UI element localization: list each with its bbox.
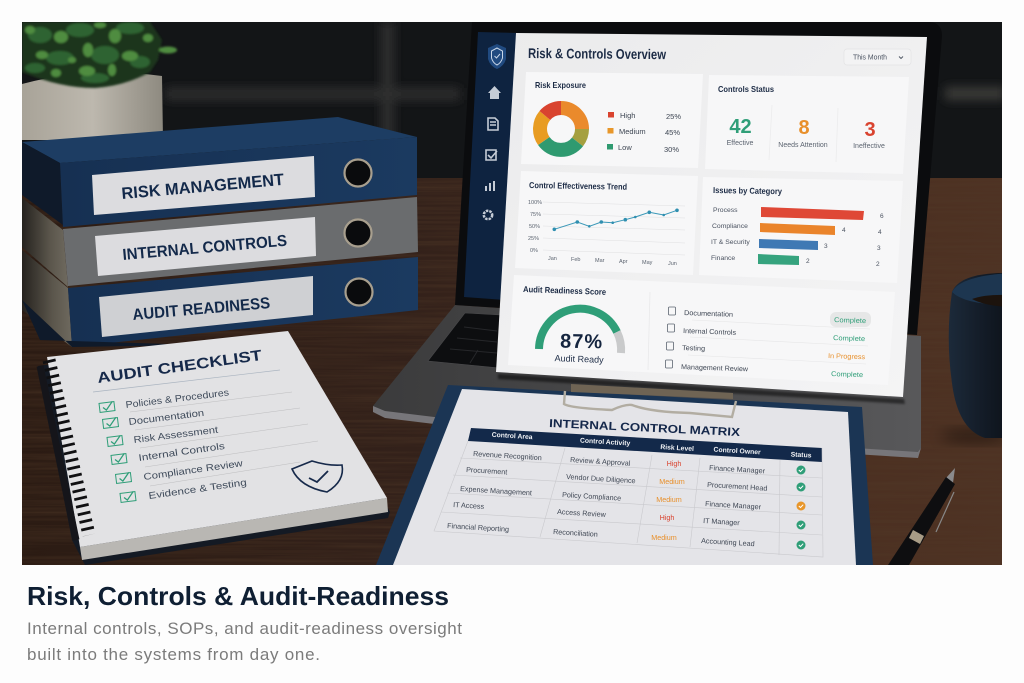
ring <box>344 160 372 186</box>
row: management review: Complete <box>831 371 863 379</box>
item: internal controls <box>111 441 226 464</box>
row: revenue recognition: High <box>667 459 681 468</box>
notebook: audit checklist <box>38 331 390 565</box>
label <box>99 276 313 337</box>
row: expense management: Expense Management <box>460 484 532 497</box>
screen bezel <box>455 22 942 335</box>
row: procurement: Vendor Due Diligence <box>566 472 636 485</box>
checklist title: AUDIT CHECKLIST <box>96 347 263 387</box>
bar chart: 3 <box>824 243 828 250</box>
row: testing: Testing <box>682 345 705 353</box>
card heading: Audit Readiness Score <box>523 284 606 297</box>
bar chart <box>711 207 884 268</box>
row: financial reporting: Financial Reporting <box>447 521 509 534</box>
keyboard <box>428 313 500 368</box>
donut legend: 45% <box>665 128 680 137</box>
row: management review <box>666 360 863 379</box>
line chart: Jan <box>548 256 557 262</box>
header labels: Control Owner <box>713 447 761 456</box>
item: internal controls: Internal Controls <box>138 441 226 464</box>
dashboard panel <box>496 33 927 404</box>
coffee mug <box>941 273 1010 443</box>
metal clip <box>564 384 736 417</box>
donut chart <box>540 108 582 150</box>
laptop <box>373 22 942 458</box>
bar chart: 4 <box>878 229 882 236</box>
card heading: Risk Exposure <box>535 80 586 90</box>
line chart: 25% <box>528 236 539 242</box>
period selector: This Month <box>853 54 887 62</box>
row: revenue recognition <box>473 449 806 475</box>
line chart: Feb <box>571 257 580 263</box>
matrix table <box>434 428 823 557</box>
panel shadow <box>498 374 905 404</box>
line chart: May <box>642 260 653 266</box>
clipboard board <box>376 385 873 565</box>
notebook cover <box>38 331 390 565</box>
icon: shield check <box>292 461 342 492</box>
dashboard title: Risk & Controls Overview <box>528 45 666 62</box>
card heading: Control Effectiveness Trend <box>529 180 627 192</box>
row: it access: High <box>660 513 674 522</box>
row: procurement <box>466 465 806 493</box>
table grid <box>434 441 823 557</box>
nav icon: home <box>488 86 501 99</box>
nav icon: checklist <box>486 150 497 160</box>
row: documentation: Documentation <box>684 310 733 319</box>
row: revenue recognition: Finance Manager <box>709 463 766 475</box>
stat: needs attention: 8 <box>798 117 810 139</box>
row: financial reporting: Accounting Lead <box>701 536 755 548</box>
photo scene <box>22 22 1010 565</box>
card heading: Controls Status <box>718 84 774 94</box>
readiness checklist <box>666 307 871 379</box>
bar chart: 3 <box>877 245 881 252</box>
ring <box>346 278 372 306</box>
ring <box>344 220 372 246</box>
spiral binding <box>40 360 89 540</box>
line chart: 50% <box>529 224 540 230</box>
matrix title: INTERNAL CONTROL MATRIX <box>549 418 741 439</box>
row: documentation: Complete <box>834 317 866 325</box>
clipboard: internal control matrix <box>376 384 873 565</box>
plant <box>22 22 177 140</box>
label text: AUDIT READINESS <box>132 295 271 324</box>
row: testing <box>666 342 866 361</box>
caption body: Internal controls, SOPs, and audit-readiness oversight <box>27 619 462 638</box>
stat: effective <box>727 116 753 147</box>
card: control effectiveness trend <box>515 171 698 275</box>
checklist items <box>99 387 318 502</box>
row: financial reporting: Reconciliation <box>553 527 598 539</box>
plant leaves <box>22 22 177 88</box>
shield logo <box>488 44 506 69</box>
donut legend <box>607 111 681 154</box>
laptop base <box>373 305 921 456</box>
gauge value: 87% <box>560 331 602 353</box>
header labels <box>491 432 812 460</box>
stat: ineffective <box>853 119 885 150</box>
line chart <box>528 200 685 267</box>
caption title: Risk, Controls & Audit-Readiness <box>27 581 449 611</box>
item: risk assessment: Risk Assessment <box>133 425 219 446</box>
row: financial reporting <box>447 521 806 550</box>
bar chart: Process <box>713 207 738 214</box>
table header <box>468 428 822 462</box>
stat: effective: 42 <box>729 116 752 138</box>
header labels: Control Area <box>491 432 533 441</box>
label text: RISK MANAGEMENT <box>121 171 285 203</box>
gauge caption: Audit Ready <box>554 353 604 365</box>
line chart: Apr <box>619 259 628 265</box>
line chart: Jun <box>668 261 677 267</box>
row: expense management <box>460 484 806 511</box>
row: revenue recognition: Review & Approval <box>570 455 631 468</box>
item: compliance review <box>115 458 244 483</box>
label <box>95 217 316 276</box>
nav icon: bars <box>485 181 495 191</box>
row: internal controls: Complete <box>833 335 865 343</box>
stat: effective: Effective <box>727 140 753 147</box>
notebook page <box>47 331 387 547</box>
caption body: built into the systems from day one. <box>27 645 320 664</box>
bar chart: IT & Security <box>711 239 750 246</box>
item: evidence and testing <box>120 477 247 502</box>
bar chart: Compliance <box>712 223 748 230</box>
donut legend: 25% <box>666 112 681 121</box>
row: expense management: Finance Manager <box>705 499 762 511</box>
panel surface <box>496 33 927 397</box>
binder: internal controls <box>22 197 418 287</box>
item: documentation: Documentation <box>128 408 205 428</box>
row: it access: Access Review <box>557 507 607 519</box>
item: documentation <box>102 408 205 428</box>
bar chart: 6 <box>880 213 884 220</box>
row: expense management: Policy Compliance <box>562 490 621 503</box>
nav icon: gear <box>484 211 492 219</box>
sidebar <box>464 32 518 300</box>
binder: risk management <box>22 117 417 227</box>
card: audit readiness score <box>508 275 895 385</box>
stat: needs attention: Needs Attention <box>778 142 828 149</box>
wooden desk <box>22 178 1002 565</box>
item: policies: Policies & Procedures <box>125 387 230 411</box>
item: risk assessment <box>107 425 219 446</box>
line chart: 75% <box>530 212 541 218</box>
row: testing: In Progress <box>828 353 866 361</box>
row: management review: Management Review <box>681 364 749 373</box>
stat: ineffective: Ineffective <box>853 143 885 150</box>
line chart: 100% <box>528 200 542 206</box>
row: financial reporting: Medium <box>651 533 677 542</box>
row: procurement: Procurement <box>466 465 508 477</box>
item: policies <box>99 387 230 412</box>
bar chart: 2 <box>876 261 880 268</box>
label text: INTERNAL CONTROLS <box>122 233 288 264</box>
binder: audit readiness <box>22 250 418 347</box>
donut legend: Medium <box>619 127 646 136</box>
stat: needs attention <box>778 117 828 149</box>
gauge <box>539 309 621 353</box>
label <box>92 156 315 215</box>
card: issues by category <box>699 177 903 283</box>
row: revenue recognition: Revenue Recognition <box>473 449 542 462</box>
stat: ineffective: 3 <box>864 119 876 141</box>
donut legend: 30% <box>664 145 679 154</box>
caption body <box>27 619 462 664</box>
item: evidence and testing: Evidence & Testing <box>148 477 247 502</box>
line chart: Mar <box>595 258 605 264</box>
card: controls status <box>706 75 885 168</box>
row: internal controls <box>668 324 865 343</box>
row: documentation <box>668 307 871 327</box>
row: it access: IT Access <box>453 500 485 511</box>
bar chart: Finance <box>711 255 735 262</box>
row: expense management: Medium <box>656 495 682 504</box>
row: internal controls: Internal Controls <box>683 328 737 337</box>
background wall <box>22 22 1005 182</box>
donut legend: High <box>620 111 635 120</box>
card: risk exposure <box>521 72 703 168</box>
row: procurement: Medium <box>659 477 685 486</box>
donut legend: Low <box>618 143 632 152</box>
plant pot <box>22 72 163 140</box>
pen <box>888 468 955 565</box>
notebook pages edge <box>80 498 388 560</box>
row: it access <box>453 500 806 530</box>
bar chart: 4 <box>842 227 846 234</box>
bar chart: 2 <box>806 258 810 265</box>
row: procurement: Procurement Head <box>707 480 768 493</box>
header labels: Control Activity <box>580 437 631 448</box>
row: it access: IT Manager <box>703 516 741 527</box>
nav icon: document <box>488 118 498 130</box>
item: compliance review: Compliance Review <box>143 458 244 483</box>
header labels: Status <box>791 451 812 460</box>
line chart: 0% <box>530 248 538 254</box>
stack of binders <box>22 117 418 347</box>
card heading: Issues by Category <box>713 185 782 196</box>
period selector <box>844 49 911 65</box>
clipboard paper <box>393 389 856 565</box>
header labels: Risk Level <box>660 444 694 453</box>
